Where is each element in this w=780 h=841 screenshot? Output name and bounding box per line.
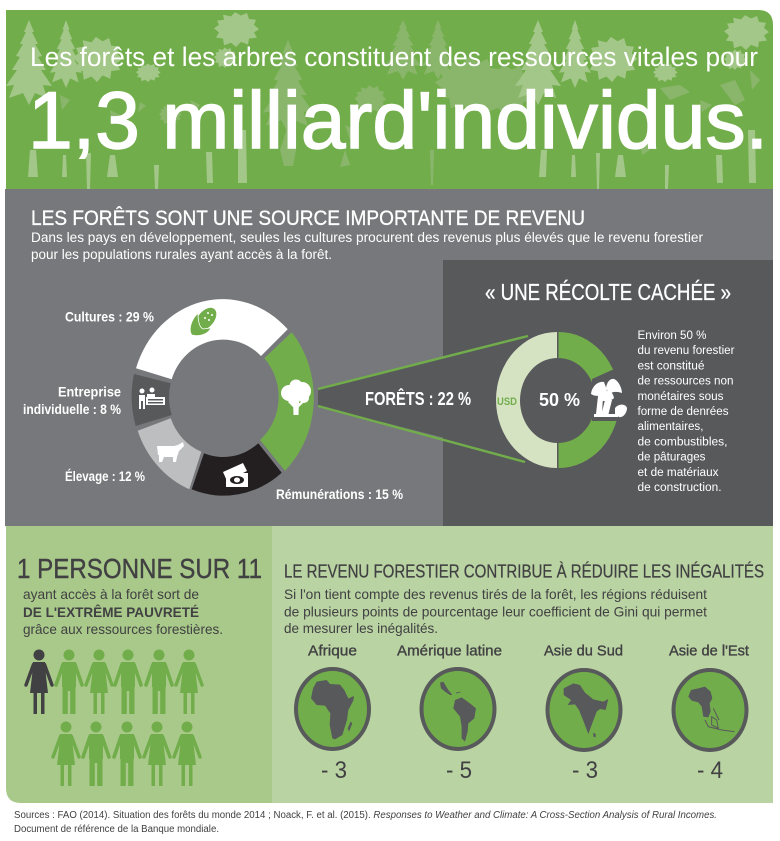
text: poverty: ayant accès à la forêt sort de (23, 586, 199, 602)
section heading: LES FORÊTS SONT UNE SOURCE IMPORTANTE DE REVENU (31, 207, 585, 230)
map: Latin America (440, 682, 476, 742)
text: hidden harvest: est constitué (638, 360, 704, 372)
map: Africa (311, 680, 354, 739)
region: Africa: - 3 (321, 757, 347, 784)
text: poverty: grâce aux ressources forestières. (23, 621, 223, 637)
pictogram: eleven people (26, 650, 202, 786)
text: poverty (23, 586, 223, 637)
text: hidden harvest: alimentaires, (638, 421, 704, 433)
region: East Asia: - 4 (697, 757, 723, 784)
region: Latin America: - 5 (446, 757, 472, 784)
slice: forests (260, 332, 314, 471)
region: South Asia: Asie du Sud (544, 642, 623, 660)
headline number: 1,3 milliard'individus. (28, 76, 768, 166)
slice: crops (136, 299, 288, 379)
region: Africa (296, 642, 369, 784)
icon: cow (157, 442, 184, 462)
sources: Sources : FAO (2014). Situation des forêts du monde 2014 ; Noack, F. et al. (2015). Responses to Weather and Climate: A Cross-Section Analysis of Rural Incomes. (14, 810, 717, 821)
slice: self-employment (132, 374, 172, 426)
icon: tree (281, 380, 311, 415)
region: Latin America (397, 642, 502, 784)
panel: income section (5, 189, 773, 526)
text: hidden harvest: de pâturages (638, 452, 706, 464)
sources (14, 810, 717, 835)
text: inequality: de mesurer les inégalités. (284, 620, 438, 636)
icon: corn (190, 304, 220, 336)
section intro: Dans les pays en développement, seules les cultures procurent des revenus plus élevés que le revenu forestier (31, 230, 703, 245)
label: forests: FORÊTS : 22 % (365, 388, 471, 409)
forest background (6, 12, 769, 189)
label: self-employment (23, 384, 121, 417)
label: self-employment: Entreprise (58, 384, 121, 400)
region: Africa: Afrique (308, 642, 357, 660)
text: hidden harvest: monétaires sous (638, 391, 724, 403)
panel: poverty (6, 526, 272, 803)
funnel connector (318, 336, 528, 462)
label: 50 percent: 50 % (539, 389, 580, 410)
donut labels (23, 308, 403, 502)
label: crops: Cultures : 29 % (65, 308, 154, 324)
region: Latin America: Amérique latine (397, 642, 502, 660)
region: East Asia (669, 642, 750, 784)
text: inequality: de plusieurs points de pourcentage leur coefficient de Gini qui permet (284, 604, 707, 620)
text: hidden harvest: et de matériaux (638, 467, 719, 479)
map: East Asia (688, 687, 734, 732)
label: USD: USD (497, 396, 517, 408)
panel: inequality (272, 526, 773, 803)
header line: Les forêts et les arbres constituent des ressources vitales pour (30, 42, 758, 72)
text: inequality (284, 586, 707, 636)
text: hidden harvest: du revenu forestier (638, 345, 735, 357)
label: self-employment: individuelle : 8 % (23, 401, 121, 417)
region: South Asia: - 3 (572, 757, 598, 784)
label: livestock: Élevage : 12 % (65, 468, 145, 484)
text: hidden harvest: de ressources non (638, 376, 734, 388)
sources: Document de référence de la Banque mondiale. (14, 824, 219, 835)
section intro: pour les populations rurales ayant accès à la forêt. (31, 247, 332, 262)
region: South Asia (544, 642, 623, 784)
text: inequality: Si l'on tient compte des revenus tirés de la forêt, les régions réduisent (284, 586, 707, 602)
text: poverty: DE L'EXTRÊME PAUVRETÉ (23, 603, 199, 620)
donut chart: 50 percent (496, 332, 630, 468)
text: hidden harvest (638, 330, 735, 494)
text: hidden harvest: de combustibles, (638, 436, 728, 448)
donut chart: income sources (132, 299, 314, 496)
panel: header (6, 10, 773, 189)
icon: money (223, 463, 248, 487)
text: hidden harvest: Environ 50 % (638, 330, 706, 342)
label: wages: Rémunérations : 15 % (276, 486, 403, 502)
slice: wages (192, 443, 282, 496)
heading: one in eleven: 1 PERSONNE SUR 11 (17, 553, 262, 584)
icon: merchant (139, 388, 165, 409)
panel: hidden harvest background (443, 260, 773, 526)
icon: mushrooms (591, 379, 627, 417)
heading: hidden harvest: « UNE RÉCOLTE CACHÉE » (485, 279, 731, 305)
text: hidden harvest: de construction. (638, 482, 722, 494)
text: hidden harvest: forme de denrées (638, 406, 729, 418)
slice: livestock (138, 418, 201, 489)
region: East Asia: Asie de l'Est (669, 642, 750, 660)
section intro (31, 230, 703, 262)
map: South Asia (564, 683, 608, 737)
